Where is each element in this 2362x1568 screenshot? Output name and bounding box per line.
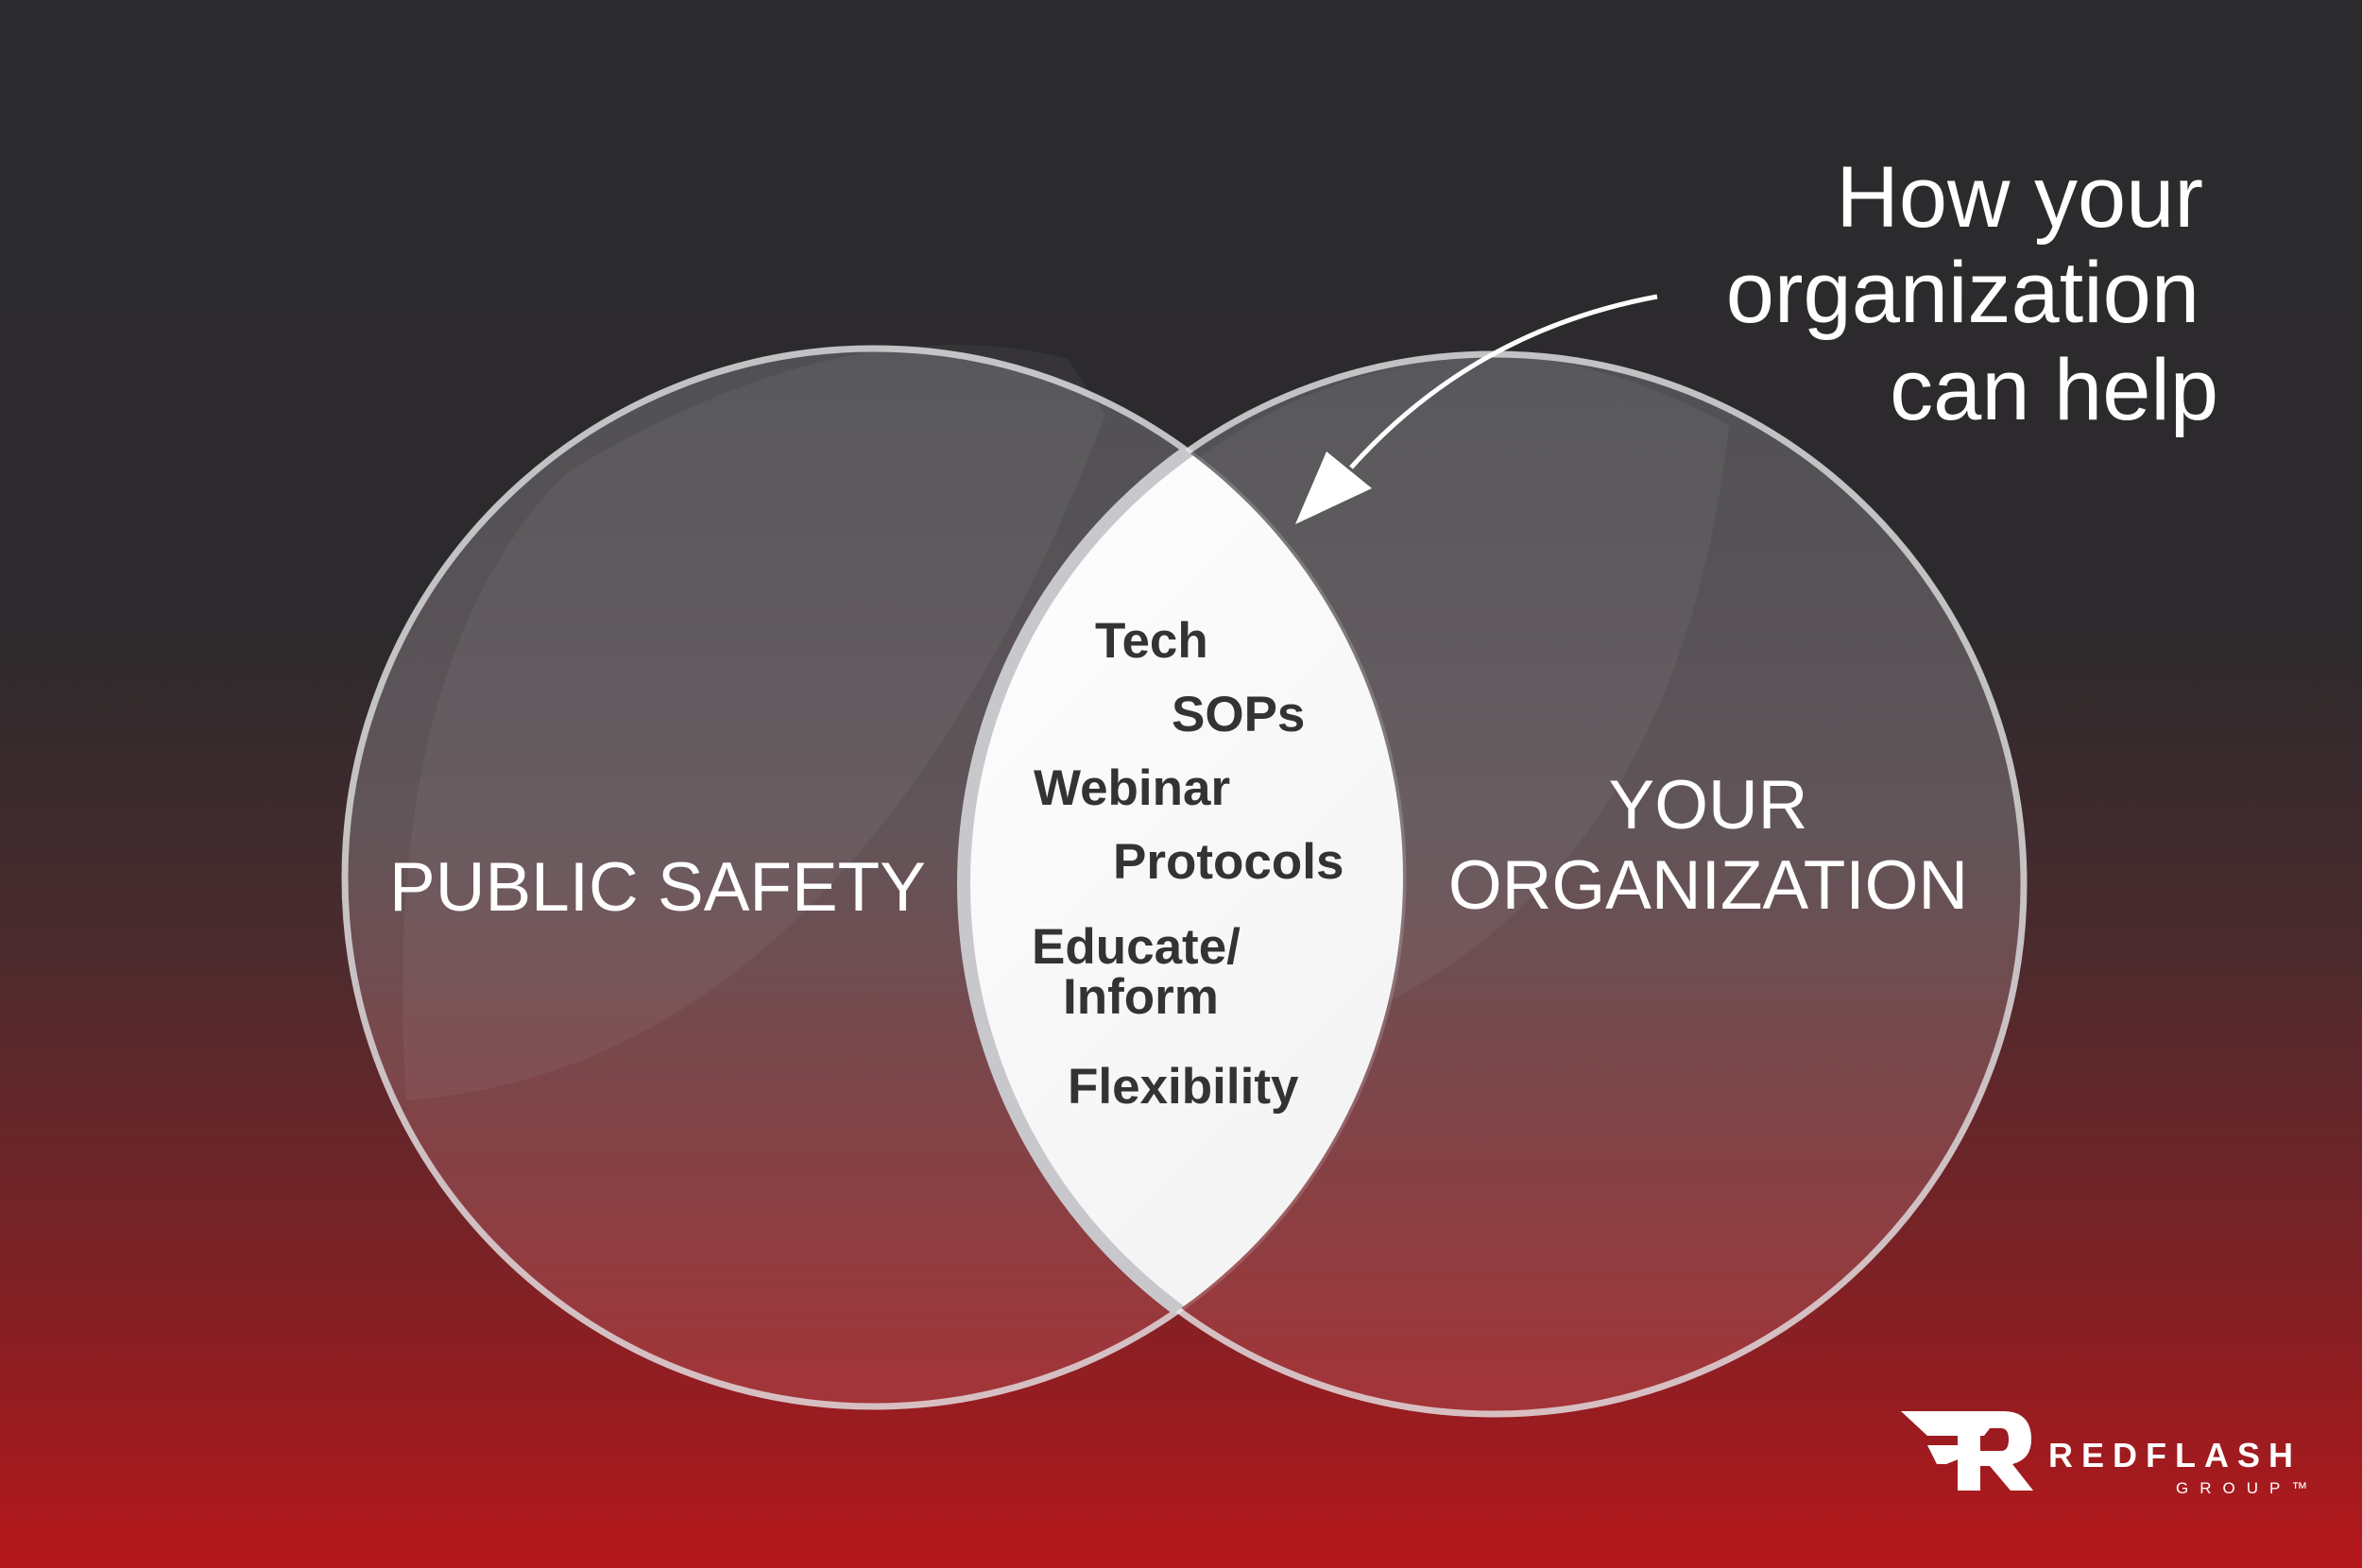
lens items list bbox=[1032, 613, 1344, 1115]
lens items list: Educate/ bbox=[1032, 919, 1241, 975]
lens items list: Inform bbox=[1063, 969, 1219, 1025]
lens items list: Tech bbox=[1095, 613, 1208, 669]
callout title: How your bbox=[1836, 149, 2203, 246]
right circle: your organization bbox=[964, 354, 2024, 1414]
label: your organization bbox=[1448, 767, 1968, 924]
callout title: can help bbox=[1890, 342, 2218, 438]
left circle: public safety bbox=[345, 345, 1403, 1406]
lens items list: SOPs bbox=[1172, 687, 1305, 742]
logo: redflash group bbox=[1901, 1411, 2319, 1497]
intersection lens bbox=[957, 450, 1403, 1314]
label: public safety: PUBLIC SAFETY bbox=[389, 849, 926, 926]
logo: redflash group: REDFLASH bbox=[2048, 1436, 2302, 1474]
callout title bbox=[1726, 149, 2218, 438]
lens items list: Flexibility bbox=[1068, 1059, 1299, 1115]
label: your organization: YOUR bbox=[1609, 767, 1807, 844]
callout title: organization bbox=[1726, 245, 2199, 341]
lens items list: Webinar bbox=[1034, 760, 1230, 816]
arrow bbox=[1295, 297, 1657, 524]
label: your organization: ORGANIZATION bbox=[1448, 847, 1968, 924]
logo: redflash group: GROUP™ bbox=[2176, 1479, 2319, 1497]
lens items list: Protocols bbox=[1113, 834, 1344, 890]
